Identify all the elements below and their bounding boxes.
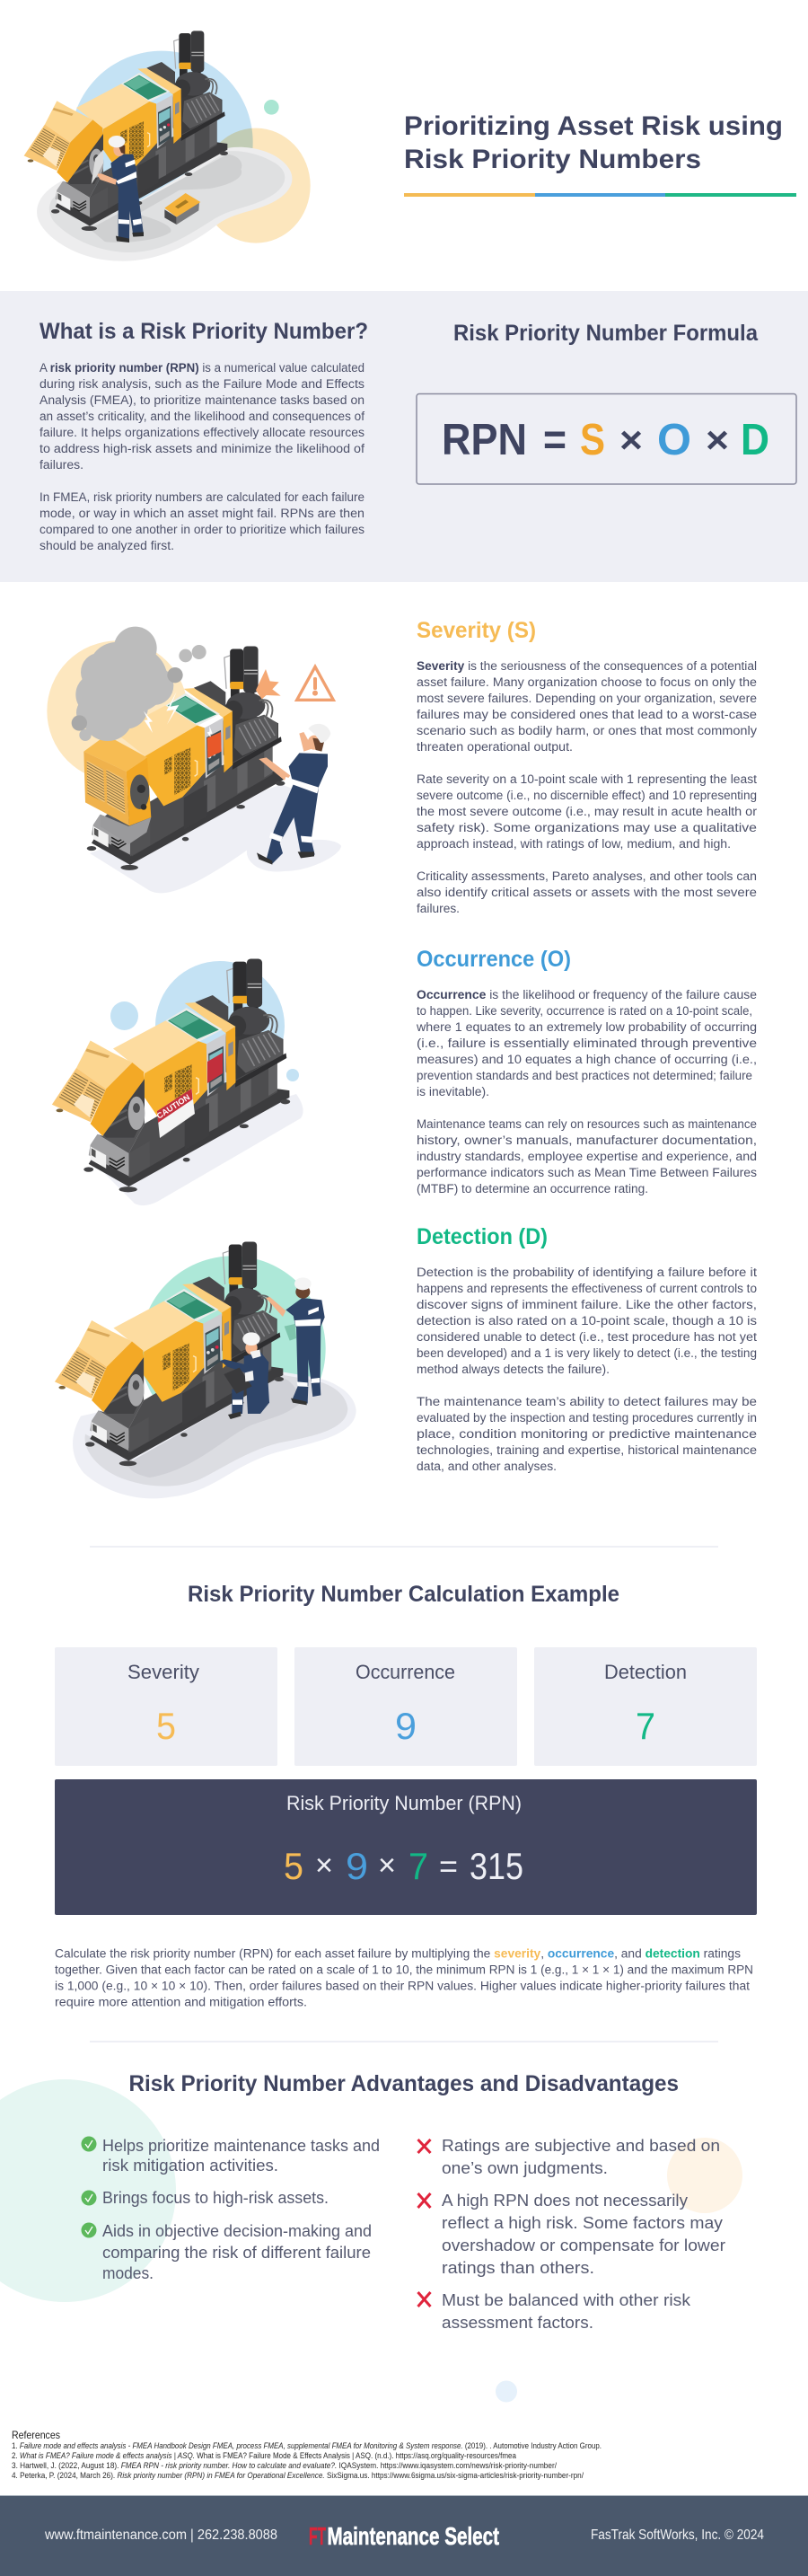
list: disadvantages: overshadow or compensate for lower [442,2236,725,2254]
list: disadvantages: Must be balanced with other risk [442,2290,691,2309]
formula box: O [657,416,691,464]
footer logo [309,2522,499,2550]
section: detection text: technologies, training and expertise, historical maintenance [417,1443,757,1457]
section: severity text: approach instead, with ratings of low, medium, and high. [417,837,731,851]
formula box: × [619,419,643,461]
cream background blob [201,128,311,243]
decorative blue circle [496,2380,517,2402]
card: severity: 5 [156,1705,176,1747]
section: occurrence text: Maintenance teams can rely on resources such as maintenance [417,1117,757,1131]
section: detection text: happens and represents the effectiveness of current controls to [417,1282,757,1295]
list: advantages: Helps prioritize maintenance tasks and [102,2136,380,2155]
list: advantages: Aids in objective decision-making and [102,2221,372,2240]
formula box [417,393,796,484]
section: occurrence text: performance indicators such as Mean Time Between Failures [417,1166,757,1179]
section: severity text: threaten operational output. [417,740,573,754]
heading: advantages and disadvantages: Risk Priority Number Advantages and Disadvantages [129,2071,679,2096]
section: occurrence text: Occurrence is the likelihood or frequency of the failure cause [417,988,757,1001]
section: detection text: place, condition monitoring or predictive maintenance [417,1427,757,1441]
text block: definition: mode, or way in which an asset might fail. RPNs are then [40,507,364,520]
panel: what is RPN and formula [0,291,808,582]
section: detection text: detection is also rated on a 10-point scale, though a 10 is [417,1314,757,1328]
text block: definition: compared to one another in order to prioritize which failures [40,523,364,536]
illustration: technicians inspecting machine [55,1241,356,1498]
references: 2. What is FMEA? Failure mode & effects analysis | ASQ. What is FMEA? Failure Mode & Effects Analysis | ASQ. (n.d.). https://asq.org/quality-resources/fmea [12,2451,516,2460]
blue background blob [70,51,253,234]
section: occurrence text: where 1 equates to an extremely low probability of occurring [416,1020,757,1034]
illustration: machine with caution sign [52,958,303,1205]
teal dot [264,100,279,115]
section: occurrence text: history, owner’s manuals, manufacturer documentation, [417,1134,757,1147]
footer copyright: FasTrak SoftWorks, Inc. © 2024 [591,2527,764,2543]
section: occurrence text: measures) and 10 equates a high chance of occurring (i.e., [417,1053,757,1066]
title underline tricolor [404,193,796,197]
formula box: × [706,419,729,461]
list: disadvantages: A high RPN does not necessarily [442,2191,689,2210]
caution sign: CAUTION [155,1092,191,1121]
section: severity text [417,618,758,915]
card: occurrence: 9 [395,1705,417,1747]
section: severity text: also identify critical assets or assets with the most severe [417,886,757,899]
text block: definition: failures. [40,458,83,472]
text block: definition: In FMEA, risk priority numbers are calculated for each failure [40,490,364,504]
warning on control panel [207,732,222,758]
card: severity: Severity [127,1661,199,1683]
card: occurrence [294,1647,517,1766]
footer logo: FT [309,2522,326,2550]
text block: calculation explanation: require more attention and mitigation efforts. [55,1996,307,2008]
text block: definition: an asset’s criticality, and the likelihood and consequences of [40,410,364,423]
illustration: technician servicing injection machine [24,31,311,261]
panel: RPN result: Risk Priority Number (RPN) [286,1792,522,1814]
list: disadvantages: one’s own judgments. [442,2158,608,2177]
section: detection text: considered unable to detect (i.e., test procedure has not yet [417,1330,757,1344]
explosion [256,669,281,699]
section: detection text: discover signs of imminent failure. Like the other factors, [417,1298,757,1311]
list: disadvantages: assessment factors. [442,2313,593,2332]
formula box: S [580,416,605,464]
section: detection text: The maintenance team’s ability to detect failures may be [417,1395,757,1408]
text block: definition: A risk priority number (RPN) is a numerical value calculated [40,361,364,375]
text block: definition: Analysis (FMEA), to prioritize maintenance tasks based on [40,393,364,407]
list: advantages [81,2136,380,2282]
illustration: overheating machine with smoke [47,627,341,893]
warning panel [207,1053,223,1083]
section: detection text: data, and other analyses. [417,1460,557,1473]
list: disadvantages: ratings than others. [442,2258,594,2277]
panel: RPN result: = [439,1848,458,1884]
teal circle [140,1256,326,1442]
panel: RPN result: 315 [470,1845,523,1887]
heading: formula: Risk Priority Number Formula [453,321,759,346]
warning triangle [297,666,333,700]
section: occurrence text: is inevitable). [417,1085,489,1098]
text block: definition [40,361,364,552]
section: severity text: asset failure. Many organization choose to focus on only the [417,675,757,689]
formula box: = [543,416,566,464]
cream circle [47,640,188,781]
card: detection: 7 [636,1705,655,1747]
floor shadow [37,147,292,261]
card: detection [534,1647,757,1766]
panel: RPN result: 5 [284,1845,303,1887]
references: References [12,2429,60,2441]
section: occurrence text [416,947,757,1195]
machine [87,646,285,870]
floor shadow [90,784,341,893]
formula box: D [741,416,769,464]
text block: calculation explanation: is 1,000 (e.g., 10 × 10 × 10). Then, order failures based on their RPN values. Higher values indicate higher-priority failures that [55,1980,750,1992]
text block: definition: to address high-risk assets and minimize the likelihood of [40,442,364,455]
heading: severity: Severity (S) [417,618,536,643]
heading: calculation example: Risk Priority Number Calculation Example [188,1582,619,1607]
section: occurrence text: (i.e., failure is essentially eliminated through preventive [417,1037,757,1050]
list: disadvantages: reflect a high risk. Some factors may [442,2213,724,2232]
section: occurrence text: to happen. Like severity, occurrence is rated on a 10-point scale, [417,1004,752,1018]
floor shadow [73,1372,356,1498]
section: occurrence text: (MTBF) to determine an occurrence rating. [417,1182,648,1195]
technician [92,136,144,243]
floor shadow [90,1094,303,1205]
title: Risk Priority Numbers [404,145,701,174]
section: severity text: severe outcome (i.e., no discernible effect) and 10 representing [417,789,757,802]
text block: calculation explanation [55,1947,753,2008]
list: disadvantages [418,2136,725,2332]
formula box: RPN [442,416,527,464]
icon: cross [418,2292,431,2307]
card: severity [55,1647,277,1766]
icon: check [81,2222,97,2238]
text block: calculation explanation: Calculate the risk priority number (RPN) for each asset failure by multiplying the severity, occurrence, and detection ratings [55,1947,741,1960]
text block: calculation explanation: together. Given that each factor can be rated on a scale of 1 to 10, the minimum RPN is 1 (e.g., 1 × 1 × 1) and the maximum RPN [55,1963,753,1976]
section: detection text: method always detects the failure). [417,1363,610,1376]
list: advantages: modes. [102,2263,154,2282]
list: advantages: Brings focus to high-risk assets. [102,2188,329,2207]
blue circles [110,961,299,1090]
machine [24,31,228,231]
references: 1. Failure mode and effects analysis - FMEA Handbook Design FMEA, process FMEA, supplemental FMEA for Monitoring & System response. (2019). . Automotive Industry Action Group. [12,2441,602,2450]
smoke clouds [72,627,206,741]
section: severity text: safety risk). Some organizations may use a qualitative [417,821,757,834]
section: severity text: Rate severity on a 10-point scale with 1 representing the least [417,772,757,786]
caution sign [155,1089,195,1138]
panel: RPN result: 9 [346,1845,368,1887]
references: 3. Hartwell, J. (2022, August 18). FMEA RPN - risk priority number. How to calculate and evaluate?. IQASystem. https://www.iqasystem.com/news/risk-priority-number/ [12,2461,557,2470]
text block: definition: during risk analysis, such as the Failure Mode and Effects [40,377,364,391]
toolbox [164,193,200,225]
text block: definition: failure. It helps organizations effectively allocate resources [40,426,364,439]
section: occurrence text: industry standards, employee expertise and experience, and [417,1150,757,1163]
section: severity text: Severity is the seriousness of the consequences of a potential [417,659,757,673]
kneeling technician [220,1332,269,1419]
card: occurrence: Occurrence [356,1661,455,1683]
panel: RPN result: × [378,1848,396,1883]
technician reacting [257,724,330,865]
icon: cross [418,2193,431,2208]
heading: detection: Detection (D) [417,1224,548,1249]
section: severity text: most severe failures. Depending on your organization, severe [417,692,757,705]
standing technician [266,1277,325,1405]
decorative orange circle [667,2138,742,2213]
icon: cross [418,2139,431,2153]
section: severity text: failures. [417,902,460,915]
card: detection: Detection [604,1661,687,1683]
closed hood [83,735,151,844]
section: detection text: Detection is the probability of identifying a failure before it [417,1266,757,1279]
decorative green circle [0,2079,176,2302]
icon: check [81,2136,97,2152]
list: advantages: risk mitigation activities. [102,2156,278,2175]
footer [0,2495,808,2576]
section: detection text: been developed) and a 1 is very likely to detect (i.e., the testing [417,1346,757,1360]
lightning sparks [144,692,213,739]
text block: definition: should be analyzed first. [40,539,174,552]
panel: RPN result: 7 [408,1845,428,1887]
list: disadvantages: Ratings are subjective and based on [442,2136,720,2155]
footer logo: Maintenance Select [327,2522,499,2550]
panel: RPN result: × [315,1848,333,1883]
section: severity text: failures may be considered ones that lead to a worst-case [417,708,757,721]
machine [52,958,290,1192]
heading: what is a RPN: What is a Risk Priority Number? [40,319,368,344]
heading: occurrence: Occurrence (O) [417,947,571,972]
references: 4. Peterka, P. (2024, March 26). Risk priority number (RPN) in FMEA for Operational Excellence. SixSigma.us. https://www.6sigma.us/six-sigma-articles/risk-priority-number-rpn/ [12,2471,584,2480]
section: detection text: evaluated by the inspection and testing procedures currently in [417,1411,757,1425]
references [12,2429,602,2480]
section: severity text: Criticality assessments, Pareto analyses, and other tools can [417,869,757,883]
section: severity text: scenario such as bodily harm, or ones that most commonly [417,724,757,737]
machine [55,1241,284,1466]
footer contact: www.ftmaintenance.com | 262.238.8088 [44,2527,277,2543]
section: detection text [417,1224,757,1473]
section: occurrence text: prevention standards and best practices not determined; failure [417,1069,752,1082]
icon: check [81,2190,97,2206]
title: Prioritizing Asset Risk using [404,111,783,141]
list: advantages: comparing the risk of different failure [102,2243,371,2262]
title [404,111,783,174]
panel: RPN result [55,1779,757,1915]
section: severity text: the most severe outcome (i.e., may result in acute health or [417,805,758,818]
